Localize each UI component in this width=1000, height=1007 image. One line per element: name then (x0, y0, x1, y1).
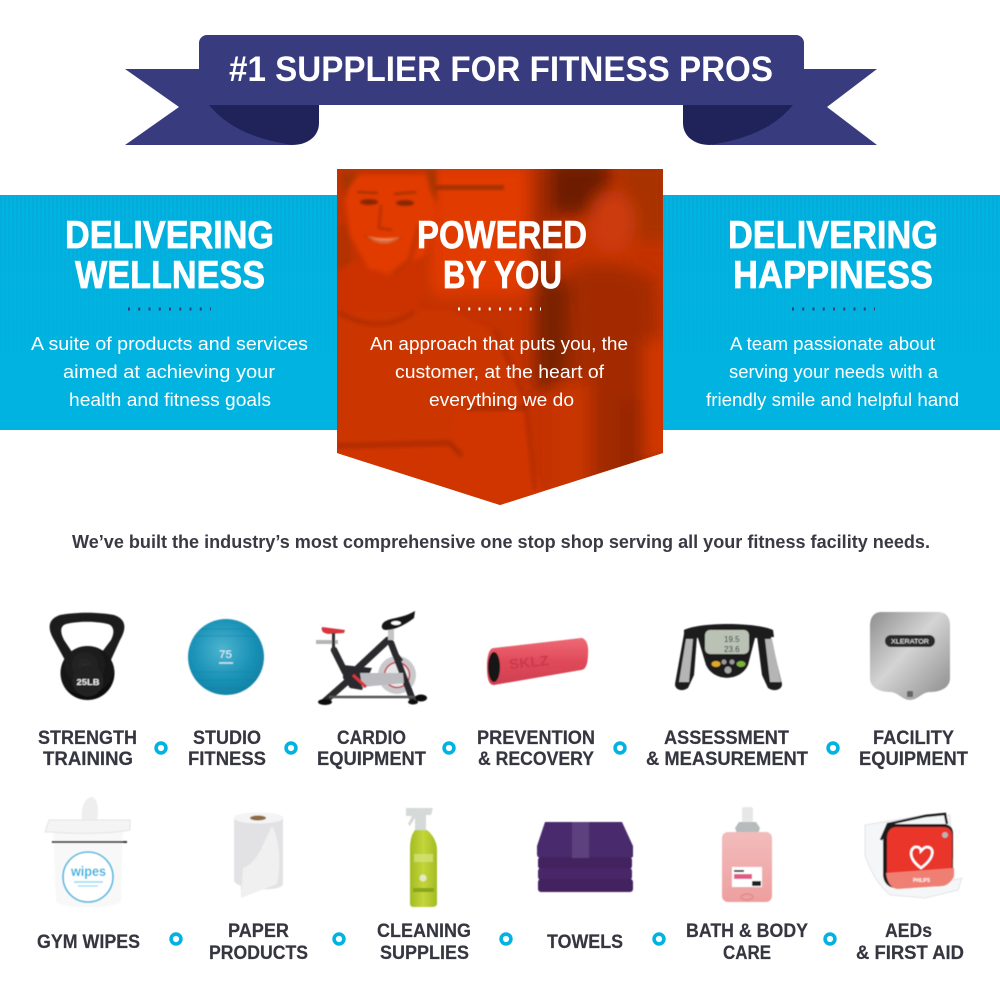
panel: delivering wellness (31, 214, 308, 410)
icon: foam roller (487, 638, 588, 685)
icon: hand dryer: XLERATOR (891, 640, 930, 646)
ribbon right tail (711, 69, 877, 145)
description: friendly smile and helpful hand (706, 389, 959, 410)
intro sentence: We’ve built the industry’s most comprehensive one stop shop serving all your fitness facility needs. (72, 532, 930, 552)
ribbon left tail (125, 69, 292, 145)
description: An approach that puts you, the (370, 333, 628, 354)
description: everything we do (429, 389, 574, 410)
ribbon title: #1 SUPPLIER FOR FITNESS PROS (229, 50, 773, 89)
category labels row 2: PAPER (228, 921, 289, 942)
category labels row 2: SUPPLIES (380, 943, 469, 964)
category labels row 1: EQUIPMENT (317, 749, 426, 770)
icon: hand dryer (870, 612, 950, 700)
description: serving your needs with a (729, 361, 939, 382)
heading (65, 214, 274, 297)
ribbon right fold (683, 105, 793, 145)
category labels row 1: ASSESSMENT (664, 728, 789, 749)
category labels row 2: TOWELS (547, 932, 623, 953)
category labels row 1: TRAINING (43, 749, 133, 770)
heading: HAPPINESS (733, 254, 933, 297)
category labels row 1: & MEASUREMENT (646, 749, 808, 770)
icon: wipes bucket: wipes (70, 863, 106, 879)
description: aimed at achieving your (63, 361, 275, 382)
heading: WELLNESS (75, 254, 265, 297)
heading: BY YOU (443, 254, 562, 297)
category labels row 2 (37, 921, 964, 964)
description: A team passionate about (730, 333, 935, 354)
ribbon left fold (209, 105, 319, 145)
icon: wipes bucket (45, 797, 130, 907)
heading: POWERED (417, 214, 587, 257)
icon: body fat analyzer: 19.5 (724, 635, 740, 644)
icon: folded towels (537, 822, 633, 892)
ring separators row 1 (156, 743, 838, 753)
heading (728, 214, 938, 297)
dotted divider (792, 308, 875, 310)
icon: body fat analyzer (675, 624, 782, 690)
icon: cleaning spray bottle (406, 808, 437, 907)
icon: paper towel roll (234, 812, 283, 898)
description (31, 333, 308, 410)
description: health and fitness goals (69, 389, 271, 410)
category labels row 2: AEDs (885, 921, 932, 942)
category labels row 1 (38, 728, 968, 770)
icon: stability ball: 75 (219, 649, 232, 661)
icon: kettlebell: 25LB (76, 678, 100, 687)
category labels row 2: CLEANING (377, 921, 471, 942)
ribbon main band (199, 35, 804, 105)
icon: foam roller: SKLZ (508, 652, 550, 672)
dotted divider (128, 308, 211, 310)
icon: AED case: PHILIPS (913, 878, 931, 884)
icon: soap refill (722, 807, 772, 902)
description (706, 333, 959, 410)
icon: body fat analyzer: 23.6 (724, 645, 740, 654)
icon: kettlebell (50, 613, 124, 700)
icon: AED case (865, 814, 962, 898)
dotted divider (458, 308, 541, 310)
description: customer, at the heart of (395, 361, 605, 382)
category labels row 1: FITNESS (188, 749, 266, 770)
category labels row 2: BATH & BODY (686, 921, 808, 942)
category labels row 1: & RECOVERY (478, 749, 594, 770)
category labels row 1: STUDIO (193, 728, 261, 749)
category labels row 2: CARE (723, 943, 771, 964)
description: A suite of products and services (31, 333, 308, 354)
panel: delivering happiness (706, 214, 959, 410)
heading: DELIVERING (728, 214, 938, 257)
description (370, 333, 628, 410)
category labels row 1: PREVENTION (477, 728, 595, 749)
photo background (337, 160, 670, 510)
category labels row 1: STRENGTH (38, 728, 137, 749)
icon: exercise bike (316, 611, 427, 705)
heading (417, 214, 587, 297)
panel: powered by you (337, 160, 670, 510)
category labels row 2: PRODUCTS (209, 943, 308, 964)
ring separators row 2 (171, 934, 835, 944)
blue band (0, 195, 1000, 430)
category labels row 1: EQUIPMENT (859, 749, 968, 770)
icon: stability ball (188, 619, 264, 695)
category labels row 2: & FIRST AID (856, 943, 964, 964)
heading: DELIVERING (65, 214, 274, 257)
category labels row 2: GYM WIPES (37, 932, 140, 953)
ribbon banner (125, 35, 877, 145)
category labels row 1: FACILITY (873, 728, 954, 749)
category labels row 1: CARDIO (337, 728, 406, 749)
